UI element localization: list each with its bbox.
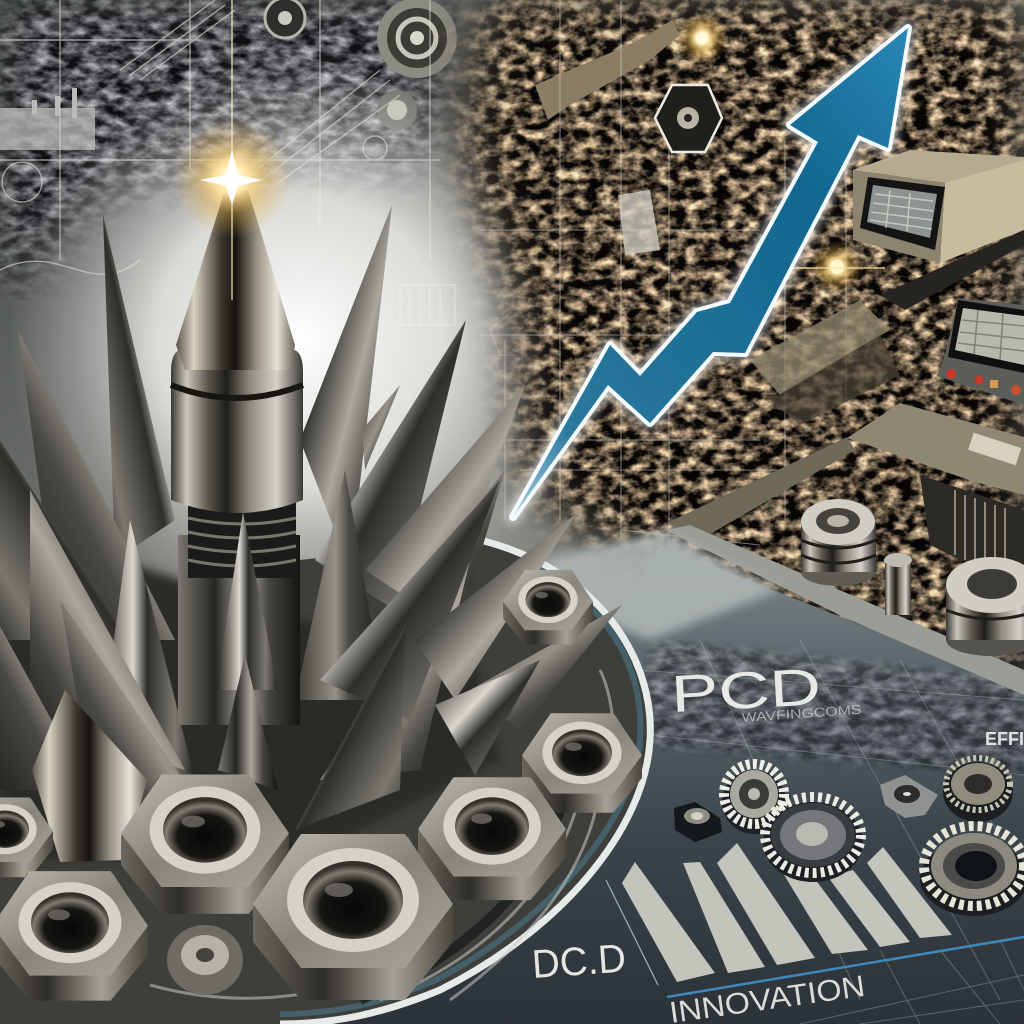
heading: PCD: PCD	[670, 658, 822, 724]
light flare top	[676, 12, 728, 64]
keyboard strip	[667, 437, 855, 540]
sketch lines	[0, 0, 545, 355]
chart axis line	[667, 937, 1024, 997]
gear 2	[763, 797, 863, 882]
icon: small gear disc	[377, 90, 417, 130]
buttons	[946, 369, 1021, 395]
glow behind bolt	[0, 50, 620, 670]
spike	[0, 425, 130, 640]
gear 4	[920, 826, 1024, 916]
machine cabinet	[853, 150, 1024, 263]
collar	[171, 350, 303, 513]
bar chart	[622, 843, 952, 982]
robot arm	[535, 20, 680, 255]
faint subtitle: WAVFINGCOMS	[741, 702, 862, 725]
spike	[95, 520, 195, 780]
monitor 1	[860, 177, 945, 250]
control console	[937, 298, 1024, 405]
spikes cluster back	[0, 205, 525, 780]
monitor 2	[948, 300, 1024, 373]
panel: factory background	[430, 0, 1024, 700]
lower shaft	[178, 535, 300, 725]
spike	[320, 560, 470, 780]
spike	[415, 514, 576, 700]
panel: upper-left technical sketches	[0, 0, 545, 355]
grid overlay	[480, 0, 846, 560]
diagonal machine bench	[750, 300, 900, 425]
spike	[435, 660, 540, 775]
icon: hexagon badge	[655, 85, 722, 152]
bullet cone	[32, 690, 147, 862]
nut back	[503, 570, 593, 645]
spike	[103, 215, 175, 560]
central bolt	[171, 190, 303, 725]
label: DC.D: DC.D	[531, 937, 627, 987]
nut center	[121, 774, 289, 914]
nut large	[253, 834, 453, 1000]
spikes cluster front	[0, 480, 622, 830]
spike	[218, 655, 278, 790]
small round nut	[167, 925, 243, 995]
table edge	[665, 525, 1024, 695]
gear 1	[722, 764, 786, 834]
cone tip	[176, 190, 295, 370]
spike	[295, 625, 405, 830]
table objects: small spring	[884, 553, 912, 615]
spike	[315, 320, 466, 610]
light flare on bolt tip	[85, 0, 440, 300]
icon: spiral gauge	[377, 0, 457, 78]
dark belt	[880, 230, 1024, 310]
nut far left	[0, 798, 53, 877]
spike	[365, 385, 525, 620]
chart: small bar sketch	[0, 88, 95, 150]
spike	[216, 512, 278, 690]
small dark nut	[674, 802, 722, 842]
round plate	[0, 540, 650, 1024]
gear 3	[943, 758, 1013, 822]
spike	[30, 490, 185, 770]
thread	[188, 500, 296, 578]
nut bottom left	[0, 871, 148, 1001]
workbench	[847, 403, 1024, 590]
nut mid right	[418, 777, 566, 900]
spike	[18, 330, 175, 640]
nut right	[522, 713, 642, 813]
spike	[295, 470, 385, 700]
table objects: parts stack	[801, 499, 876, 586]
spike	[320, 480, 500, 720]
arrow	[513, 28, 908, 517]
panel: lower-right data surface	[332, 499, 1024, 1024]
light flare right	[790, 241, 885, 293]
spike	[430, 470, 505, 590]
table objects: right parts stack	[946, 557, 1024, 656]
spike	[0, 590, 90, 790]
small hex part	[880, 775, 938, 818]
dark base behind spikes	[0, 520, 500, 860]
spike	[362, 385, 400, 470]
chart vertical line	[606, 880, 658, 985]
spike	[300, 205, 392, 570]
side tag: EFFI	[985, 729, 1024, 749]
spike	[470, 605, 622, 730]
spike	[60, 600, 190, 830]
icon: round dial	[265, 0, 305, 38]
grid on panel	[640, 640, 1024, 1024]
